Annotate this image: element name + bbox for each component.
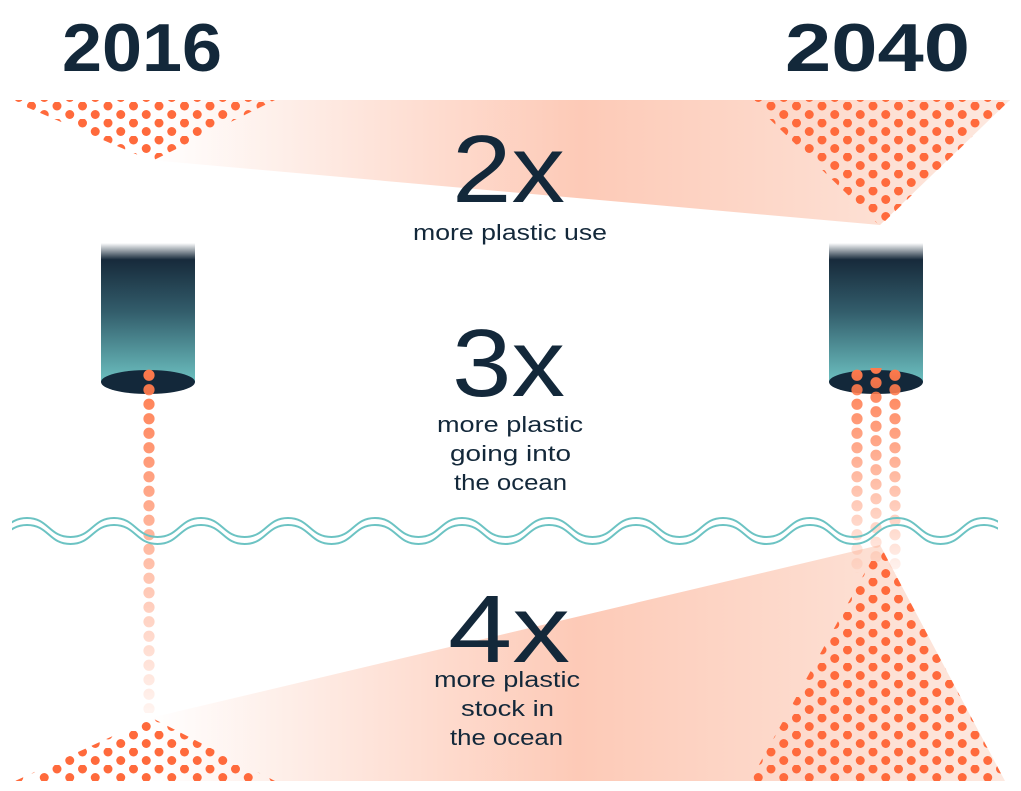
stat: 2x plastic use [413,116,607,245]
waves: ocean surface [0,518,1021,544]
stat: 3x plastic into ocean: going into [450,441,571,466]
falling dots 2016 [143,370,155,713]
stat: 2x plastic use: more plastic use [413,220,607,245]
stat: 3x plastic into ocean [437,310,583,495]
heading: 2016: 2016 [62,10,222,86]
stat: 3x plastic into ocean: more plastic [437,412,583,437]
stat: 4x plastic stock: more plastic [434,667,580,692]
icon: pipe 2016 [101,243,195,394]
heading: 2040: 2040 [785,10,970,86]
stat: 4x plastic stock: the ocean [450,725,563,750]
band: plastic use top [150,100,1010,225]
triangle: 2040 ocean stock [750,545,1005,781]
triangle: 2016 ocean stock [15,718,275,781]
triangle: 2040 plastic use [750,100,1010,226]
band: plastic stock bottom [150,545,1005,781]
stat: 4x plastic stock: stock in [461,696,554,721]
stat: 2x plastic use: 2x [452,116,565,223]
icon: pipe 2040 [829,243,923,394]
stat: 4x plastic stock: 4x [448,576,570,683]
stat: 4x plastic stock [434,576,580,750]
stat: 3x plastic into ocean: 3x [452,310,565,417]
stat: 3x plastic into ocean: the ocean [454,470,567,495]
falling dots 2040 [851,368,901,573]
triangle: 2016 plastic use [10,100,275,161]
